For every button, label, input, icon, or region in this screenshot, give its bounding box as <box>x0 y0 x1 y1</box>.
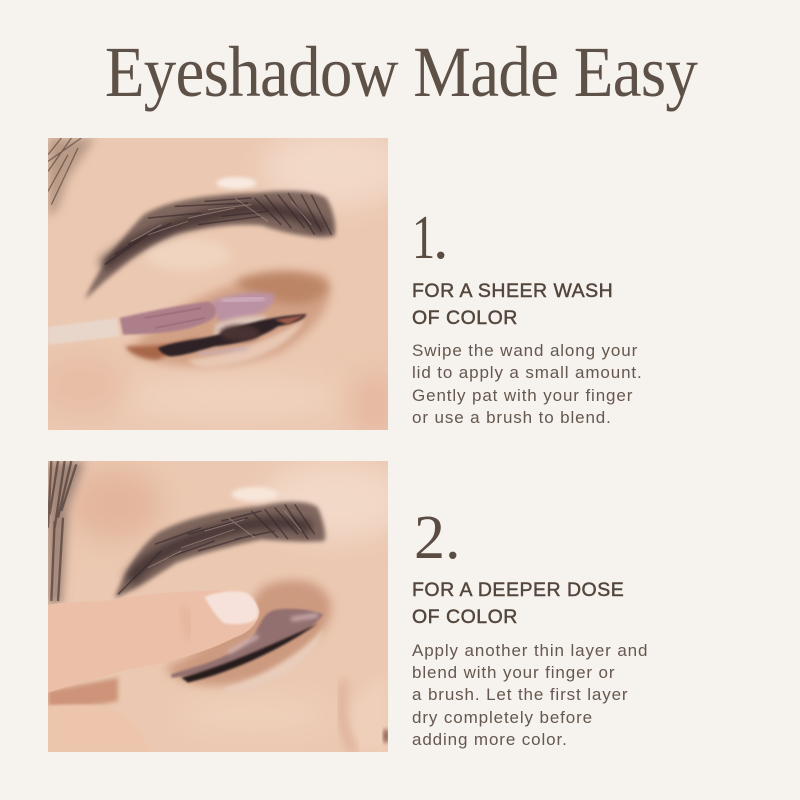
crevice under finger <box>48 678 118 706</box>
highlight on brow bone <box>231 487 278 502</box>
step 1 heading <box>412 280 613 329</box>
step 2 number: 2. <box>414 504 460 572</box>
eyebrow <box>115 502 325 598</box>
step 2 body <box>412 641 648 749</box>
step 2 body: a brush. Let the first layer <box>412 685 628 704</box>
step 2 heading: FOR A DEEPER DOSE <box>412 579 624 601</box>
eyelid shimmer pigment <box>171 609 323 678</box>
title: Eyeshadow Made Easy <box>105 32 697 112</box>
step 2 heading <box>412 579 624 628</box>
hair on left <box>48 461 85 604</box>
under-eye lid <box>225 628 325 694</box>
step 1 body <box>412 341 643 427</box>
step 2 heading: OF COLOR <box>412 606 518 628</box>
highlight on brow bone <box>216 177 256 189</box>
lower finger <box>48 705 148 752</box>
step 1 heading: FOR A SHEER WASH <box>412 280 613 302</box>
step 1 number <box>412 204 448 272</box>
photo: wand applying eyeshadow <box>48 138 388 430</box>
eye socket shadow <box>128 274 330 366</box>
wand shaft <box>48 318 120 345</box>
step 1 body: lid to apply a small amount. <box>412 363 643 382</box>
eyebrow <box>85 191 335 300</box>
step 2 body: blend with your finger or <box>412 663 615 682</box>
fingernail <box>205 591 258 624</box>
finger <box>48 590 260 693</box>
step 1 body: Swipe the wand along your <box>412 341 638 360</box>
step 2 body: adding more color. <box>412 730 568 749</box>
eye socket shadow <box>165 580 331 686</box>
step 1 number: 1 <box>412 204 435 272</box>
step 1 body: Gently pat with your finger <box>412 386 633 405</box>
hair at top left <box>48 138 95 218</box>
step 2 body: dry completely before <box>412 708 593 727</box>
step 2 body: Apply another thin layer and <box>412 641 648 660</box>
step 1 heading: OF COLOR <box>412 307 518 329</box>
eye and lashes <box>158 314 306 356</box>
nose <box>342 674 389 752</box>
wand tip <box>120 301 216 335</box>
under-eye lid <box>188 320 305 368</box>
step 1 body: or use a brush to blend. <box>412 408 612 427</box>
photo: finger blending eyeshadow <box>48 461 388 752</box>
step 1 number: . <box>433 204 448 272</box>
eye lash line <box>181 624 318 683</box>
eyelid shimmer pigment <box>211 292 275 322</box>
